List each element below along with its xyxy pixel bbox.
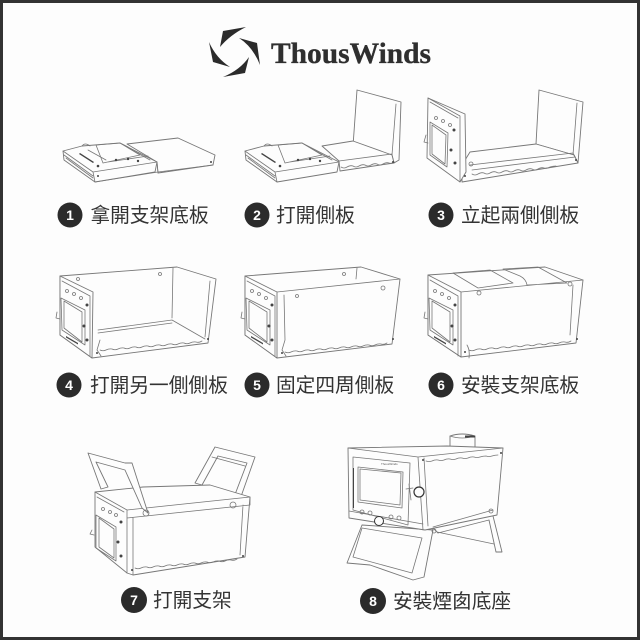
step number 2: 2: [253, 207, 261, 223]
step number 7: [121, 587, 147, 613]
drawing: one side panel opened: [245, 90, 401, 182]
drawing: stand frames opened: [88, 447, 255, 575]
step number 6: [428, 372, 454, 398]
label: 打開支架: [153, 590, 232, 612]
step number 4: 4: [65, 377, 73, 393]
step 8: [347, 434, 511, 614]
step number 5: 5: [253, 377, 261, 393]
drawing: other side panel opened: [56, 267, 216, 358]
drawing: folded base plate: [63, 138, 215, 182]
step number 5: [244, 372, 270, 398]
door knob: [406, 484, 424, 500]
brand name: ThousWinds: [271, 37, 431, 70]
step 3: [424, 90, 583, 228]
logo: ThousWinds: [209, 27, 431, 77]
step number 2: [244, 202, 270, 228]
label: 拿開支架底板: [90, 204, 209, 227]
step 1: [58, 138, 215, 228]
step 6: [424, 267, 583, 398]
step number 1: [58, 202, 82, 228]
label: 立起兩側側板: [461, 205, 579, 227]
stove door: [353, 457, 410, 526]
step 7: [88, 447, 255, 613]
step number 3: 3: [437, 207, 445, 223]
step number 8: 8: [369, 593, 377, 609]
step number 3: [428, 202, 454, 228]
drawing: four sides fixed: [241, 267, 400, 358]
drawing: assembled stove with chimney base: ThousWinds: [381, 462, 398, 466]
step number 4: [56, 372, 82, 398]
label: 打開側板: [276, 205, 355, 227]
label: 安裝煙囱底座: [393, 591, 511, 613]
icon: pinwheel mark: [209, 27, 260, 77]
step number 8: [360, 588, 386, 614]
drawing: both side panels raised: [424, 90, 583, 182]
label: 安裝支架底板: [461, 375, 579, 397]
step 4: [56, 267, 228, 398]
step 2: [244, 90, 401, 228]
label: 打開另一側側板: [90, 375, 228, 397]
chimney base: [446, 434, 478, 449]
step number 7: 7: [130, 592, 138, 608]
drawing: assembled stove with chimney base: [347, 434, 503, 580]
step number 1: 1: [66, 207, 74, 223]
step number 6: 6: [437, 377, 445, 393]
label: 固定四周側板: [276, 375, 394, 397]
drawing: base plates installed on top: [424, 267, 583, 358]
step 5: [241, 267, 400, 398]
